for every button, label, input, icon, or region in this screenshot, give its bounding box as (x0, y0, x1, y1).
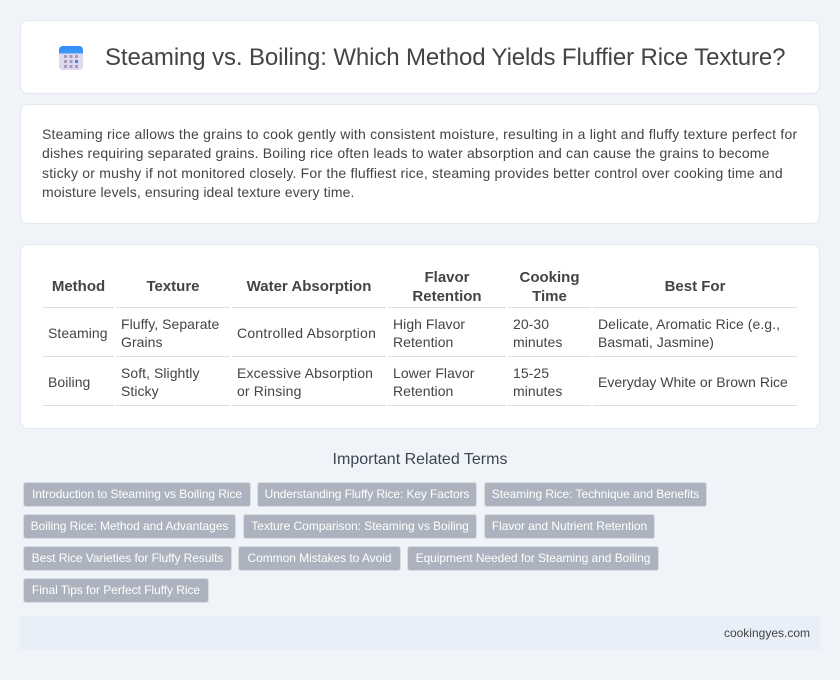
related terms tags: Introduction to Steaming vs Boiling Rice (32, 487, 242, 501)
row: boiling (48, 365, 788, 399)
row: steaming (48, 316, 780, 350)
row: boiling: Retention (393, 383, 453, 399)
table header: Retention (412, 288, 482, 305)
table header (52, 269, 726, 305)
row: boiling: Sticky (121, 383, 159, 399)
table header: Time (532, 288, 567, 305)
table header: Method (52, 278, 105, 295)
footer bar (20, 616, 820, 650)
row: steaming: minutes (513, 334, 562, 350)
row: steaming: 20-30 (513, 316, 549, 332)
table header: Texture (146, 278, 200, 295)
row: steaming: High Flavor (393, 316, 465, 332)
footer source: cookingyes.com (724, 626, 810, 640)
row: steaming: Grains (121, 334, 163, 350)
icon: calendar (59, 46, 83, 70)
row: steaming: Controlled Absorption (237, 325, 376, 341)
row: steaming: Fluffy, Separate (121, 316, 219, 332)
table header: Cooking (520, 269, 580, 286)
related terms tags (23, 482, 707, 603)
intro text: sticky or mushy if not monitored closely. For the fluffiest rice, steaming provides better control over cooking time and (42, 165, 783, 181)
table header: Flavor (424, 269, 470, 286)
title panel (20, 20, 820, 94)
row: steaming: Basmati, Jasmine) (598, 334, 714, 350)
related terms tags: Best Rice Varieties for Fluffy Results (32, 551, 223, 565)
table header: Best For (665, 278, 725, 295)
related terms tags: Flavor and Nutrient Retention (492, 519, 647, 533)
related terms tags: Texture Comparison: Steaming vs Boiling (251, 519, 469, 533)
row: boiling: Excessive Absorption (237, 365, 373, 381)
related terms tags: Boiling Rice: Method and Advantages (31, 519, 228, 533)
row: boiling: or Rinsing (237, 383, 302, 399)
row: boiling: Soft, Slightly (121, 365, 200, 381)
related terms tags: Common Mistakes to Avoid (248, 551, 391, 565)
related terms tags: Final Tips for Perfect Fluffy Rice (32, 583, 200, 597)
row: boiling: Boiling (48, 374, 90, 390)
row: boiling: 15-25 (513, 365, 549, 381)
intro text panel (20, 104, 820, 224)
table header: Water Absorption (247, 278, 371, 295)
related terms heading: Important Related Terms (333, 451, 507, 468)
related terms tags: Equipment Needed for Steaming and Boiling (416, 551, 650, 565)
row: boiling: Lower Flavor (393, 365, 475, 381)
intro text (42, 126, 797, 200)
intro text: moisture levels, ensuring ideal texture every time. (42, 184, 354, 200)
row: boiling: minutes (513, 383, 562, 399)
heading: Steaming vs. Boiling: Which Method Yields Fluffier Rice Texture? (105, 44, 785, 71)
row: steaming: Delicate, Aromatic Rice (e.g., (598, 316, 780, 332)
intro text: Steaming rice allows the grains to cook gently with consistent moisture, resulting in a light and fluffy texture perfect for (42, 126, 797, 142)
related terms tags: Steaming Rice: Technique and Benefits (492, 487, 699, 501)
related terms tags: Understanding Fluffy Rice: Key Factors (265, 487, 469, 501)
row: steaming: Retention (393, 334, 453, 350)
row: steaming: Steaming (48, 325, 108, 341)
intro text: dishes requiring separated grains. Boiling rice often leads to water absorption and can cause the grains to become (42, 145, 770, 161)
comparison table (43, 269, 797, 406)
row: boiling: Everyday White or Brown Rice (598, 374, 788, 390)
table panel (20, 244, 820, 429)
